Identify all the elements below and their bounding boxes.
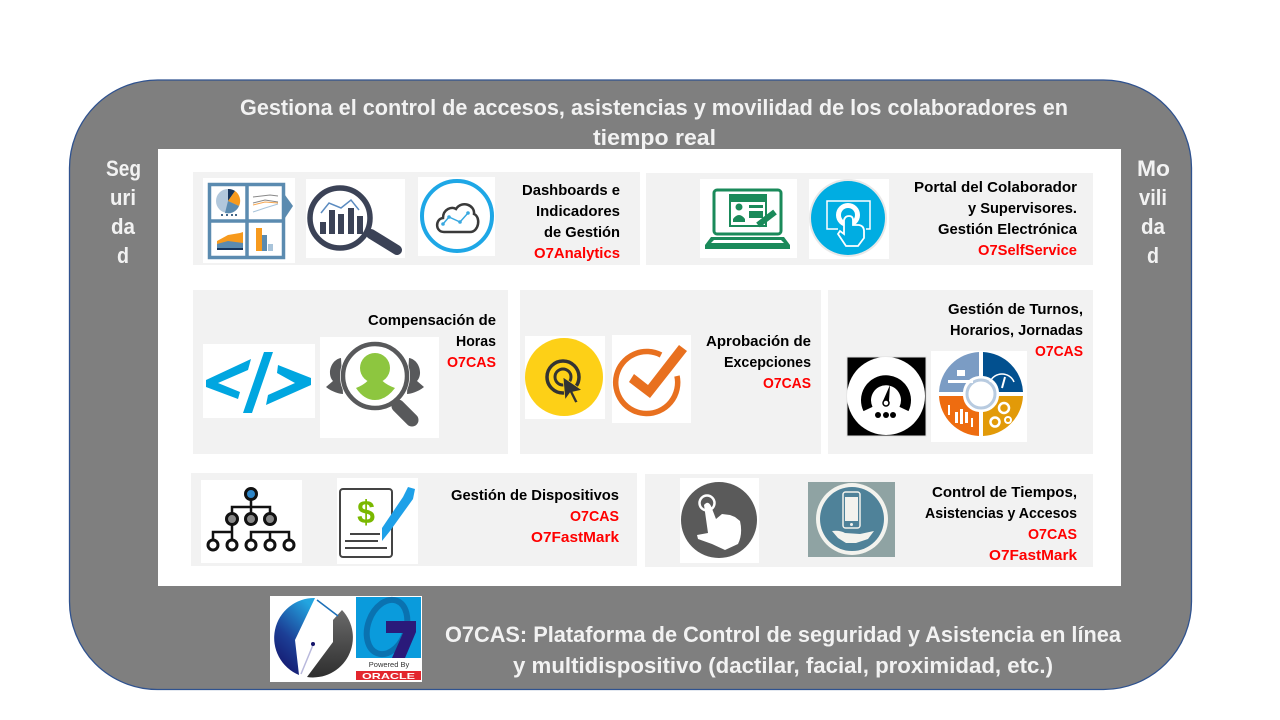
text: dispositivos: Gestión de Dispositivos [451,487,619,504]
footer description: O7CAS: Plataforma de Control de seguridad y Asistencia en línea [445,622,1122,647]
left label: seguridad: d [117,243,129,268]
text: turnos: O7CAS [1035,343,1083,360]
text: aprobacion [706,333,811,392]
text: portal: y Supervisores. [968,200,1077,217]
text: compensacion: O7CAS [447,354,496,371]
text: turnos: Horarios, Jornadas [950,322,1083,339]
icon: four quadrant wheel [931,351,1027,442]
white central panel [158,149,1121,586]
text: compensacion: Compensación de [368,312,496,329]
panel: dispositivos [191,473,637,566]
text: control: O7FastMark [989,547,1078,564]
text: dashboards: Dashboards e [522,182,620,199]
text: portal: Gestión Electrónica [938,221,1078,238]
panel: turnos [828,290,1093,454]
panel: compensacion [193,290,508,454]
icon: code brackets [203,344,315,418]
panel: control de tiempos [645,474,1093,567]
text: aprobacion: Excepciones [724,354,811,371]
icon: yellow target cursor [525,336,605,419]
text: portal: Portal del Colaborador [914,179,1077,196]
logo: O7 powered by Oracle: ORACLE [362,671,415,681]
panel: dashboards [193,172,640,265]
icon: org tree [201,480,302,563]
logo: O7 powered by Oracle: Powered By [369,660,409,669]
right label: movilidad: vili [1139,185,1167,210]
panel: portal [646,173,1093,265]
title [240,95,1068,150]
text: dispositivos: O7CAS [570,508,619,525]
icon: person under magnifier [320,337,439,438]
left label: seguridad: uri [110,185,136,210]
text: control: O7CAS [1028,526,1077,543]
icon: signed document [337,478,418,564]
text: portal [914,179,1078,259]
icon: cloud analytics [418,177,495,256]
text: dashboards: O7Analytics [534,245,620,262]
right label: movilidad: da [1141,214,1166,239]
icon: green laptop [700,179,797,258]
title: tiempo real [593,125,716,150]
text: compensacion: Horas [456,333,496,350]
icon: touch screen [809,179,889,259]
text: control: Control de Tiempos, [932,484,1077,501]
icon: magnifier over bar chart [306,179,405,258]
left label: seguridad: Seg [106,156,141,181]
icon: signed document: $ [357,494,375,530]
icon: orange check [612,335,691,423]
left label: seguridad [106,156,141,268]
text: dispositivos: O7FastMark [531,529,620,546]
icon: black gauge [847,357,926,436]
footer description [445,622,1122,678]
right label: movilidad [1137,156,1170,268]
footer description: y multidispositivo (dactilar, facial, proximidad, etc.) [513,653,1053,678]
text: aprobacion: O7CAS [763,375,811,392]
icon: dark touch hand [680,478,759,563]
text: compensacion [368,312,496,371]
logo: O7 powered by Oracle [270,594,422,682]
outer gray rounded frame [70,80,1192,690]
panel: aprobacion [520,290,821,454]
text: dashboards: de Gestión [544,224,620,241]
icon: dashboard charts [203,178,295,263]
text: dashboards: Indicadores [536,203,620,220]
right label: movilidad: d [1147,243,1159,268]
text: dispositivos [451,487,620,546]
text: aprobacion: Aprobación de [706,333,811,350]
text: portal: O7SelfService [978,242,1077,259]
text: control: Asistencias y Accesos [925,505,1077,522]
text: turnos: Gestión de Turnos, [948,301,1083,318]
icon: phone on hand [808,482,895,557]
text: dashboards [522,182,620,262]
left label: seguridad: da [111,214,136,239]
text: control [925,484,1078,564]
text: turnos [948,301,1083,360]
right label: movilidad: Mo [1137,156,1170,181]
title: Gestiona el control de accesos, asistencias y movilidad de los colaboradores en [240,95,1068,120]
